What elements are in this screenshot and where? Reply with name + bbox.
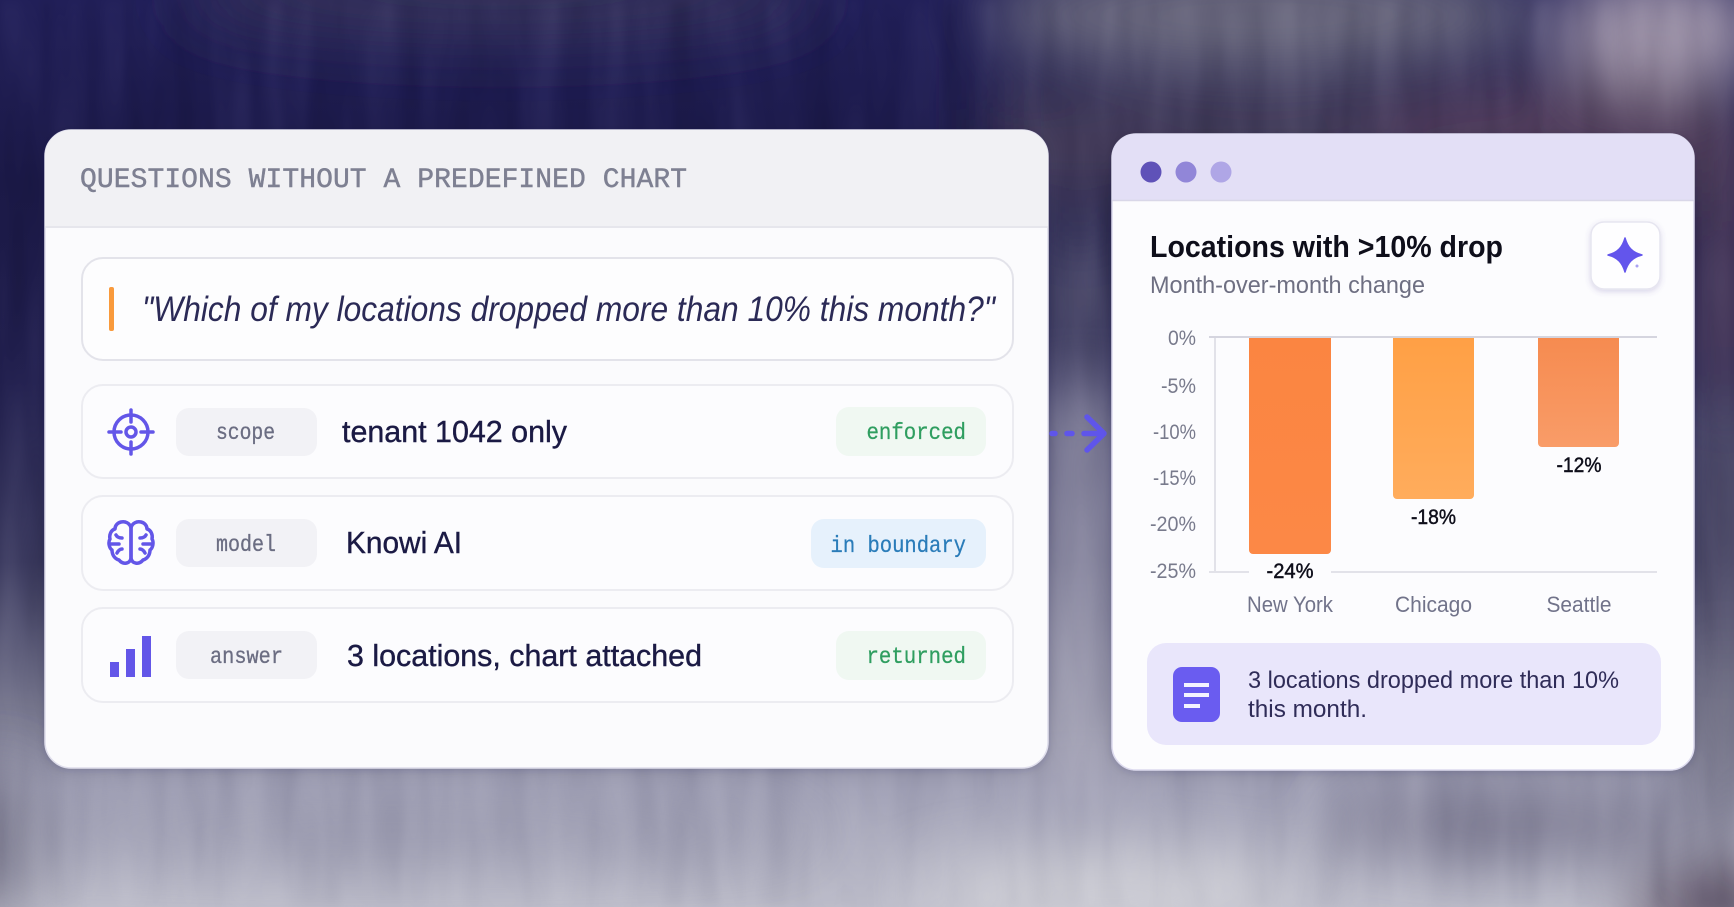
status badge: in boundary bbox=[811, 519, 986, 568]
status badge: enforced bbox=[836, 407, 986, 456]
icon: bar chart bbox=[110, 636, 151, 677]
status badge: returned bbox=[836, 631, 986, 680]
category labels: Seattle bbox=[1546, 592, 1612, 617]
orange accent bar bbox=[109, 287, 114, 331]
bar chart bbox=[1150, 327, 1657, 617]
label pill: model bbox=[176, 519, 317, 567]
panel card bbox=[45, 130, 1048, 768]
panel header bar bbox=[45, 130, 1048, 227]
label pill: model: model bbox=[216, 532, 276, 558]
chart title: Locations with >10% drop bbox=[1150, 229, 1503, 264]
icon: sparkle button bbox=[1591, 222, 1660, 289]
label pill: scope: scope bbox=[216, 420, 275, 446]
panel: questions without a predefined chart bbox=[45, 130, 1048, 768]
value label: Seattle: -12% bbox=[1556, 454, 1602, 477]
bar: New York bbox=[1249, 338, 1331, 554]
row: answer bbox=[82, 608, 1013, 702]
y axis labels: -10% bbox=[1153, 421, 1196, 444]
chart subtitle: Month-over-month change bbox=[1150, 272, 1425, 299]
value label: New York bbox=[1249, 558, 1331, 584]
category labels: New York bbox=[1247, 592, 1334, 617]
icon: brain bbox=[109, 522, 153, 563]
panel heading: QUESTIONS WITHOUT A PREDEFINED CHART bbox=[80, 165, 687, 196]
window title bar bbox=[1112, 134, 1694, 200]
status badge: returned: returned bbox=[866, 644, 966, 670]
value: answer summary: 3 locations, chart attached bbox=[347, 638, 702, 673]
window card bbox=[1112, 134, 1694, 770]
summary callout bbox=[1147, 643, 1661, 745]
panel: chart result window bbox=[1112, 134, 1694, 770]
value label: New York: -24% bbox=[1266, 560, 1314, 583]
window control dots bbox=[1140, 162, 1232, 182]
value: tenant: tenant 1042 only bbox=[342, 414, 567, 449]
row: model bbox=[82, 496, 1013, 590]
y axis labels bbox=[1150, 327, 1196, 583]
category labels: Chicago bbox=[1395, 592, 1472, 617]
category labels bbox=[1247, 592, 1612, 617]
value: Knowi AI: Knowi AI bbox=[346, 525, 462, 560]
y axis labels: -15% bbox=[1153, 467, 1196, 490]
bar: Seattle bbox=[1538, 338, 1619, 447]
icon: target bbox=[109, 410, 153, 454]
y axis labels: -25% bbox=[1150, 560, 1196, 583]
status badge: enforced: enforced bbox=[866, 420, 966, 446]
summary text: this month. bbox=[1248, 696, 1367, 723]
y axis labels: -20% bbox=[1150, 513, 1196, 536]
summary text: 3 locations dropped more than 10% bbox=[1248, 667, 1619, 694]
row: scope bbox=[82, 385, 1013, 478]
summary text bbox=[1248, 667, 1619, 723]
bar: Chicago bbox=[1393, 338, 1474, 499]
status badge: in boundary: in boundary bbox=[830, 533, 966, 559]
icon: document bbox=[1173, 667, 1220, 722]
y axis labels: 0% bbox=[1168, 327, 1196, 350]
y axis labels: -5% bbox=[1161, 375, 1196, 398]
value label: Chicago: -18% bbox=[1411, 506, 1456, 529]
question box bbox=[82, 258, 1013, 360]
label pill: answer: answer bbox=[210, 644, 283, 670]
question text: "Which of my locations dropped more than 10% this month?" bbox=[142, 290, 996, 329]
label pill: answer bbox=[176, 631, 317, 679]
arrow: dashed connector bbox=[1052, 417, 1104, 450]
label pill: scope bbox=[176, 408, 317, 456]
